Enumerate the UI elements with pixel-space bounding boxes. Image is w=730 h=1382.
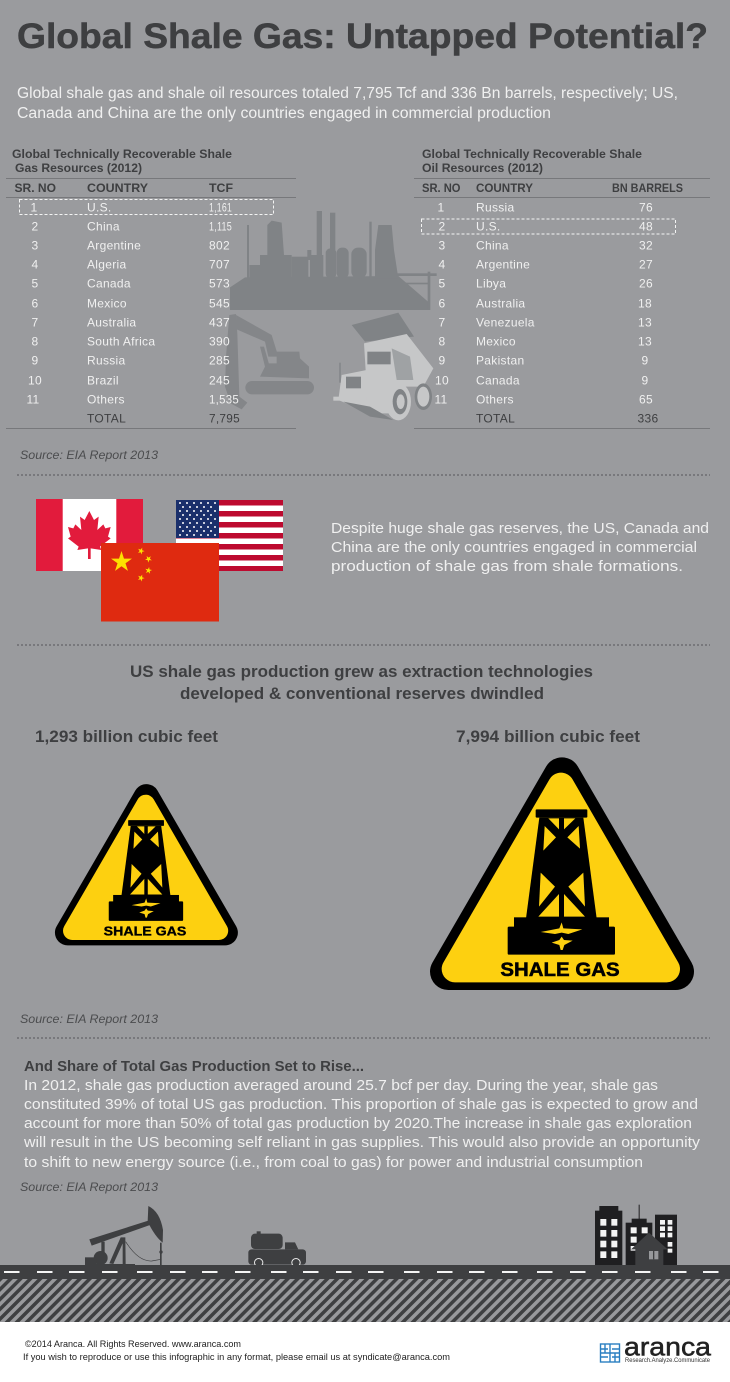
table header: [422, 183, 683, 195]
copyright text: [23, 1339, 450, 1363]
table rows: 245: [209, 374, 230, 388]
icon: USA flag: [176, 500, 283, 571]
table rows: 1,535: [209, 392, 239, 406]
text: share of production body: [23, 1078, 701, 1171]
panel: shale oil resources table: [414, 147, 710, 429]
source note: Source: EIA Report 2013: [20, 1012, 158, 1026]
road: [0, 1265, 730, 1279]
icon: city buildings: [595, 1205, 677, 1267]
table header: TCF: [209, 183, 233, 195]
value label: 1,293 bcf: 1,293 billion cubic feet: [35, 728, 219, 746]
table rows: 13: [638, 334, 652, 348]
table rows: Brazil: [87, 374, 119, 388]
table rows: 3: [32, 238, 39, 252]
table rows: 9: [32, 354, 39, 368]
icon: large shale gas warning sign: [448, 776, 676, 981]
panel: shale gas resources table: [6, 147, 296, 429]
aranca logo: [600, 1332, 712, 1364]
highlight: U.S. row: [422, 219, 676, 234]
table rows: 1: [31, 200, 38, 214]
table rows: TOTAL: [87, 412, 126, 426]
source note: Source: EIA Report 2013: [20, 1180, 158, 1194]
table rows: 390: [209, 334, 230, 348]
table rows: 2: [439, 220, 446, 234]
table title: Global Technically Recoverable Shale: [12, 147, 232, 161]
table header: BN BARRELS: [612, 183, 683, 195]
table rows: 9: [439, 354, 446, 368]
icon: oil pumpjack: [85, 1206, 163, 1271]
footer: [0, 1322, 730, 1382]
table rows: Libya: [476, 276, 506, 290]
table rows: U.S.: [476, 220, 501, 234]
icon: Canada flag: [36, 499, 143, 571]
table rows: 437: [209, 316, 230, 330]
heading: US shale gas production: US shale gas production grew as extraction technologies: [130, 663, 593, 681]
table rows: 11: [26, 392, 40, 406]
table rows: [26, 200, 240, 426]
copyright text: ©2014 Aranca. All Rights Reserved. www.aranca.com: [25, 1339, 241, 1350]
table header: COUNTRY: [476, 183, 533, 195]
table rows: Argentine: [476, 258, 530, 272]
table rows: Mexico: [476, 334, 516, 348]
copyright text: If you wish to reproduce or use this infographic in any format, please email us at syndicate@aranca.com: [23, 1352, 450, 1363]
value label: 7,994 bcf: 7,994 billion cubic feet: [456, 728, 641, 746]
aranca logo: aranca: [624, 1332, 712, 1362]
table rows: 10: [28, 374, 42, 388]
table rows: 48: [639, 220, 653, 234]
table rows: 5: [32, 276, 39, 290]
table rows: 13: [638, 316, 652, 330]
table rows: 7: [439, 316, 446, 330]
table rows: Mexico: [87, 296, 127, 310]
icon: large shale gas warning sign: SHALE GAS: [500, 960, 620, 981]
table rows: 4: [439, 258, 446, 272]
table rows: U.S.: [87, 200, 112, 214]
table rows: Others: [476, 392, 514, 406]
excavator: [225, 314, 314, 409]
table title: Gas Resources (2012): [15, 161, 142, 175]
table rows: Venezuela: [476, 316, 535, 330]
table rows: 1,115: [209, 220, 232, 234]
table rows: 285: [209, 354, 230, 368]
intro text: Canada and China are the only countries engaged in commercial production: [17, 105, 551, 122]
table rows: South Africa: [87, 334, 155, 348]
text: commercial production statement: production of shale gas from shale formations.: [331, 558, 683, 575]
table rows: 802: [209, 238, 230, 252]
table header: [14, 183, 233, 195]
table rows: Russia: [87, 354, 126, 368]
table rows: 18: [638, 296, 652, 310]
table rows: Pakistan: [476, 354, 524, 368]
table rows: Canada: [476, 374, 520, 388]
table rows: 5: [439, 276, 446, 290]
table title: [422, 147, 642, 175]
text: commercial production statement: Despite huge shale gas reserves, the US, Canada and: [331, 520, 709, 537]
refinery silhouette: [230, 211, 437, 310]
table rows: Argentine: [87, 238, 141, 252]
table header: SR. NO: [422, 183, 461, 195]
heading: US shale gas production: [130, 663, 593, 703]
icon: small shale gas warning sign: SHALE GAS: [104, 924, 187, 939]
table rows: 9: [642, 374, 649, 388]
table rows: Russia: [476, 200, 515, 214]
table rows: 1: [438, 200, 445, 214]
table rows: 3: [439, 238, 446, 252]
table rows: 7,795: [209, 412, 240, 426]
text: share of production body: constituted 39% of total US gas production. This proportion of shale gas is expected to grow and: [24, 1097, 698, 1113]
table rows: 76: [639, 200, 653, 214]
aranca logo: Research.Analyze.Communicate: [625, 1358, 711, 1364]
table rows: 9: [642, 354, 649, 368]
text: commercial production statement: China are the only countries engaged in commercial: [331, 539, 697, 556]
table title: Global Technically Recoverable Shale: [422, 147, 642, 161]
table rows: 65: [639, 392, 653, 406]
table rows: 27: [639, 258, 653, 272]
heading: US shale gas production: developed & conventional reserves dwindled: [180, 685, 544, 703]
table rows: 6: [32, 296, 39, 310]
intro text: Global shale gas and shale oil resources totaled 7,795 Tcf and 336 Bn barrels, respectively; US,: [17, 85, 678, 102]
table rows: 545: [209, 296, 230, 310]
table rows: 11: [434, 392, 448, 406]
ground hatch: [0, 1279, 730, 1322]
table header: SR. NO: [14, 183, 56, 195]
icon: tanker truck: [248, 1231, 306, 1267]
text: share of production body: to shift to new energy source (i.e., from coal to gas) for power and industrial consumption: [24, 1155, 643, 1171]
table rows: 8: [439, 334, 446, 348]
table rows: [434, 200, 658, 426]
table rows: Others: [87, 392, 125, 406]
text: share of production body: will result in the US becoming self reliant in gas supplies. This would also provide an opportunity: [23, 1135, 701, 1151]
flags: [36, 499, 283, 622]
intro text: [17, 85, 678, 122]
table rows: China: [476, 238, 509, 252]
icon: China flag: [101, 543, 219, 622]
table rows: 7: [32, 316, 39, 330]
table title: Oil Resources (2012): [422, 161, 543, 175]
table rows: Algeria: [87, 258, 126, 272]
table rows: 573: [209, 276, 230, 290]
table rows: 4: [32, 258, 39, 272]
table rows: 26: [639, 276, 653, 290]
table rows: Australia: [87, 316, 136, 330]
dump truck: [333, 313, 433, 420]
table title: [12, 147, 232, 175]
highlight: U.S. row: [20, 200, 274, 214]
table rows: TOTAL: [476, 412, 515, 426]
table rows: 336: [638, 412, 658, 426]
table rows: 32: [639, 238, 653, 252]
table rows: 8: [32, 334, 39, 348]
icon: small shale gas warning sign: [68, 797, 225, 939]
text: share of production body: account for more than 50% of total gas production by 2020.The increase in shale gas exploration: [24, 1116, 692, 1132]
table rows: Australia: [476, 296, 525, 310]
table rows: 707: [209, 258, 230, 272]
table rows: Canada: [87, 276, 131, 290]
table rows: China: [87, 220, 120, 234]
table rows: 10: [435, 374, 449, 388]
text: commercial production statement: [331, 520, 709, 575]
text: share of production body: In 2012, shale gas production averaged around 25.7 bcf per day. During the year, shale gas: [24, 1078, 658, 1094]
source note: Source: EIA Report 2013: [20, 448, 158, 462]
table rows: 1,161: [209, 200, 232, 214]
table header: COUNTRY: [87, 183, 148, 195]
title: Global Shale Gas: Untapped Potential?: [17, 17, 708, 56]
table rows: 2: [32, 220, 39, 234]
background illustration: refinery and mining vehicles: [225, 211, 437, 420]
table rows: 6: [439, 296, 446, 310]
subheading: share of total gas production: And Share of Total Gas Production Set to Rise...: [24, 1059, 364, 1075]
